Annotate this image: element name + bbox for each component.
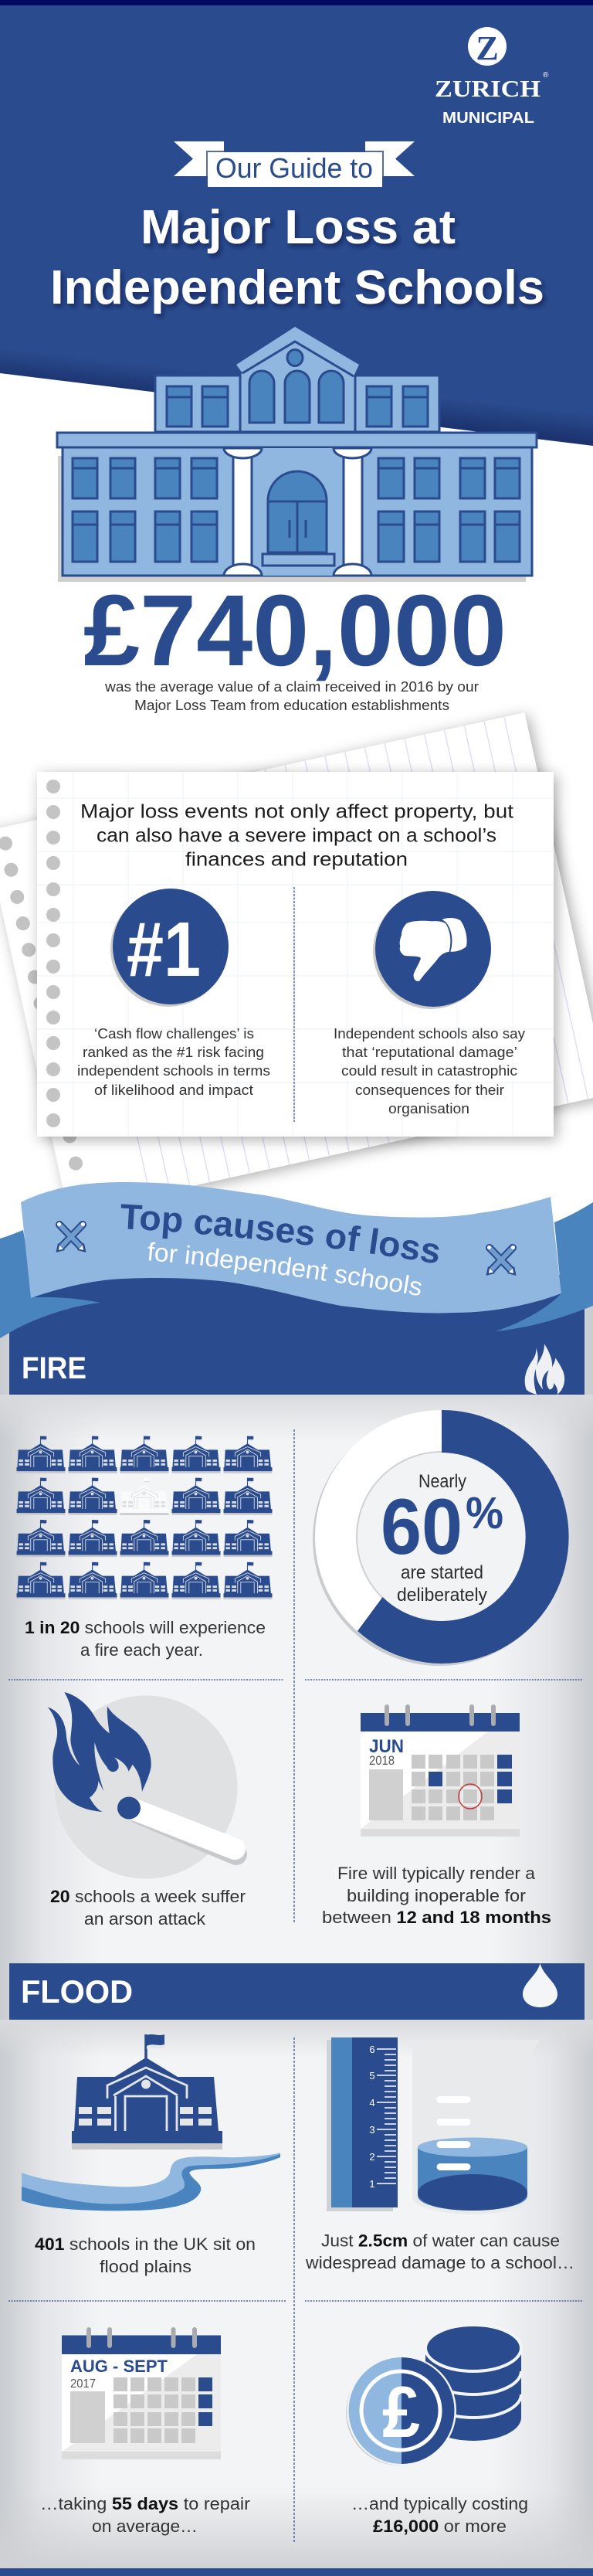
text: reputational damage: consequences for their: [355, 1082, 504, 1098]
icon: ruler and beaker with water: 4: [369, 2097, 375, 2109]
card heading: can also have a severe impact on a school’s: [97, 825, 496, 847]
card heading: finances and reputation: [185, 848, 408, 870]
dividers: [8, 1429, 583, 2542]
banner: Our Guide to: [174, 141, 415, 187]
icon: calendar August to September 2017: AUG - SEPT: [70, 2357, 168, 2376]
icon: number one badge: [110, 889, 229, 1007]
text: inoperable building: building inoperable for: [347, 1886, 526, 1905]
icon: crossed pencils left: [56, 1222, 86, 1252]
icon: water drop: [523, 1963, 557, 2007]
icon: pound coins: £: [382, 2371, 420, 2452]
text: arson attack: an arson attack: [84, 1909, 206, 1929]
text: arson attack: [50, 1887, 246, 1929]
text: reputational damage: Independent schools also say: [334, 1026, 525, 1042]
text: typical cost: …and typically costing: [351, 2494, 528, 2513]
icon: calendar June 2018: 2018: [369, 1753, 395, 1768]
chart: donut 60% started deliberately: 60: [381, 1483, 463, 1571]
icon: ruler and beaker with water: 1: [369, 2178, 375, 2190]
banner: top causes of loss: [0, 1182, 593, 1338]
panel: major loss impact card: [37, 772, 554, 1137]
chart: donut 60% started deliberately: Nearly: [418, 1471, 466, 1492]
chart: donut 60% started deliberately: deliberately: [397, 1585, 487, 1606]
card heading: [80, 800, 513, 870]
text: 2.5cm of water: [305, 2231, 574, 2272]
banner: Our Guide to: Our Guide to: [215, 152, 373, 184]
text: inoperable building: between 12 and 18 months: [322, 1908, 551, 1927]
logo: Zurich Municipal: ZURICH: [435, 75, 540, 102]
section bar: fire: FIRE: [22, 1351, 86, 1385]
logo: Zurich Municipal: ®: [543, 71, 549, 80]
text: cash flow: independent schools in terms: [77, 1063, 270, 1079]
chart: donut 60% started deliberately: are started: [401, 1562, 483, 1583]
text: typical cost: £16,000 or more: [373, 2517, 507, 2536]
text: reputational damage: organisation: [388, 1101, 469, 1116]
icon: school by river: [22, 2034, 280, 2211]
header background: [0, 0, 593, 464]
illustration: school building: [57, 327, 537, 582]
text: inoperable building: Fire will typically render a: [337, 1864, 536, 1883]
icon: flame: [525, 1344, 564, 1395]
icon: calendar August to September 2017: [62, 2330, 221, 2459]
icon: ruler and beaker with water: 2: [369, 2151, 375, 2163]
icon: thumbs down badge: [373, 891, 491, 1009]
text: 1 in 20 schools: [25, 1618, 266, 1660]
text: cash flow: ‘Cash flow challenges’ is: [94, 1026, 254, 1042]
text: cash flow: ranked as the #1 risk facing: [83, 1045, 264, 1060]
icon: ruler and beaker with water: 5: [369, 2070, 375, 2082]
title: [50, 201, 544, 314]
text: 2.5cm of water: widespread damage to a school…: [305, 2253, 574, 2272]
text: reputational damage: that ‘reputational damage’: [342, 1045, 517, 1060]
section bar: fire: [9, 1275, 585, 1395]
text: flood plains: 401 schools in the UK sit on: [35, 2234, 256, 2254]
statistic: average claim value: Major Loss Team from education establishments: [134, 698, 449, 713]
text: cash flow: of likelihood and impact: [94, 1082, 253, 1098]
icon: number one badge: #1: [127, 906, 201, 993]
title: Independent Schools: [50, 261, 544, 314]
logo: Zurich Municipal: [435, 27, 549, 127]
text: arson attack: 20 schools a week suffer: [50, 1887, 246, 1906]
icon: ruler and beaker with water: 6: [369, 2044, 375, 2055]
icon: ruler and beaker with water: [327, 2037, 540, 2214]
title: Major Loss at: [141, 201, 456, 254]
logo: Zurich Municipal: MUNICIPAL: [442, 110, 534, 127]
text: 55 days to repair: …taking 55 days to repair: [40, 2494, 250, 2513]
section bar: flood: FLOOD: [21, 1973, 133, 2010]
back sheet of lined paper: [0, 712, 593, 1213]
statistic: average claim value: was the average value of a claim received in 2016 by our: [104, 679, 479, 695]
card heading: Major loss events not only affect property, but: [80, 800, 513, 822]
logo: Zurich Municipal: Z: [476, 29, 499, 67]
text: 1 in 20 schools: a fire each year.: [80, 1640, 203, 1660]
icon: calendar June 2018: JUN: [369, 1736, 404, 1757]
chart: 1 in 20 schools pictogram: [17, 1436, 272, 1599]
icon: calendar June 2018: [361, 1707, 520, 1837]
text: 1 in 20 schools: 1 in 20 schools will experience: [25, 1618, 266, 1637]
text: 55 days to repair: on average…: [92, 2517, 198, 2536]
text: typical cost: [351, 2494, 528, 2536]
banner: top causes of loss: Top causes of loss: [120, 1204, 439, 1263]
lower page background: [0, 1306, 593, 2576]
statistic: average claim value: £740,000: [83, 573, 507, 687]
chart: donut 60% started deliberately: [313, 1410, 569, 1666]
text: 55 days to repair: [40, 2494, 250, 2536]
icon: ruler and beaker with water: 3: [369, 2124, 375, 2136]
icon: crossed pencils right: [486, 1246, 516, 1276]
banner: top causes of loss: for independent schools: [148, 1242, 422, 1295]
icon: burning match: [48, 1692, 237, 1879]
section bar: flood: [9, 1963, 585, 2020]
icon: calendar August to September 2017: 2017: [70, 2377, 96, 2391]
icon: pound coins: [346, 2325, 521, 2466]
text: flood plains: flood plains: [100, 2257, 191, 2276]
text: reputational damage: [334, 1026, 525, 1116]
chart: donut 60% started deliberately: %: [466, 1488, 503, 1538]
text: flood plains: [35, 2234, 256, 2276]
text: reputational damage: could result in catastrophic: [341, 1063, 517, 1079]
text: inoperable building: [322, 1864, 551, 1927]
text: 2.5cm of water: Just 2.5cm of water can cause: [321, 2231, 560, 2250]
text: cash flow: [77, 1026, 270, 1098]
